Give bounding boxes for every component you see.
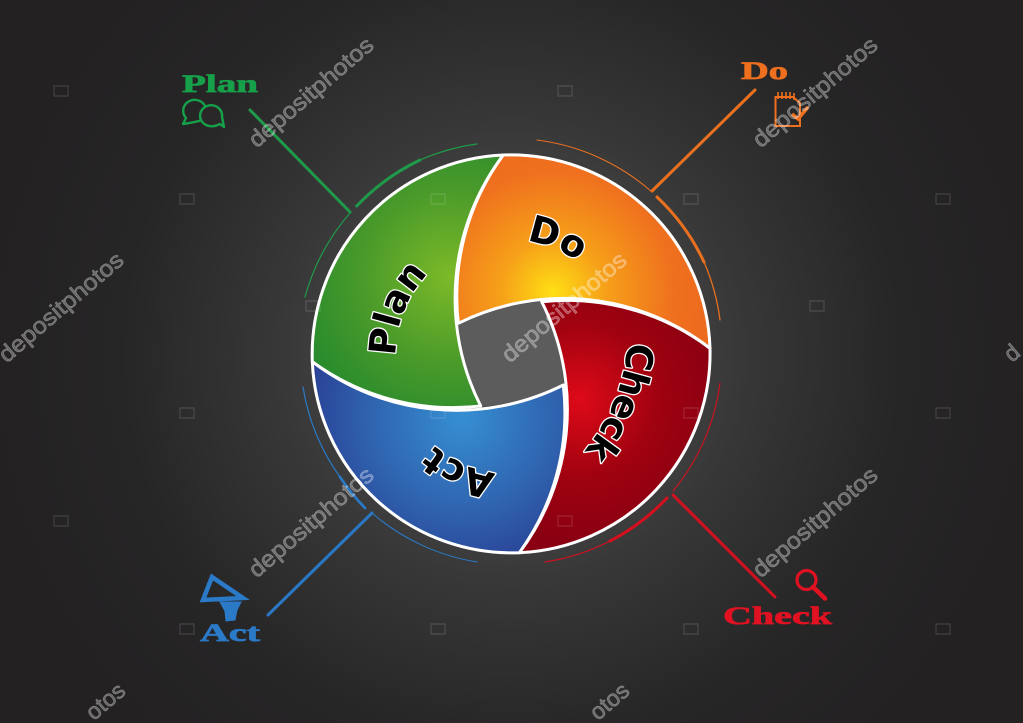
watermark camera marks bbox=[54, 86, 950, 634]
pie chart: PDCA wheel bbox=[310, 153, 712, 554]
heading: Plan: Plan bbox=[182, 71, 258, 98]
sector label: Plan: Plan bbox=[367, 264, 428, 354]
sector: Act bbox=[312, 362, 565, 553]
outer arcs and leader: Act bbox=[268, 387, 477, 615]
sector label: Act: Act bbox=[421, 445, 497, 499]
center square bbox=[458, 302, 563, 406]
sector: Check bbox=[519, 300, 710, 553]
sector label: Do: Do bbox=[528, 214, 585, 258]
watermark text: depositphotos bbox=[747, 31, 883, 152]
icon: magnifier bbox=[797, 570, 825, 598]
outer arcs and leader: Do bbox=[537, 90, 755, 320]
sector: Plan bbox=[312, 155, 503, 408]
icon: speech bubbles bbox=[183, 100, 224, 127]
sector label: Check: Check bbox=[582, 344, 655, 464]
heading: Check: Check bbox=[723, 603, 832, 630]
watermark text: depositphotos bbox=[243, 461, 379, 582]
watermark text: depositphotos bbox=[747, 461, 883, 582]
icon: notepad with check bbox=[776, 92, 808, 126]
outer arcs and leader: Plan bbox=[250, 110, 477, 297]
watermark text: depositphotos bbox=[243, 31, 379, 152]
icon: megaphone bbox=[203, 577, 243, 621]
heading: Do: Do bbox=[741, 58, 788, 85]
sector: Do bbox=[457, 155, 710, 348]
watermark text: depositphotos bbox=[496, 246, 632, 367]
heading: Act: Act bbox=[200, 620, 261, 647]
outer arcs and leader: Check bbox=[545, 383, 775, 597]
